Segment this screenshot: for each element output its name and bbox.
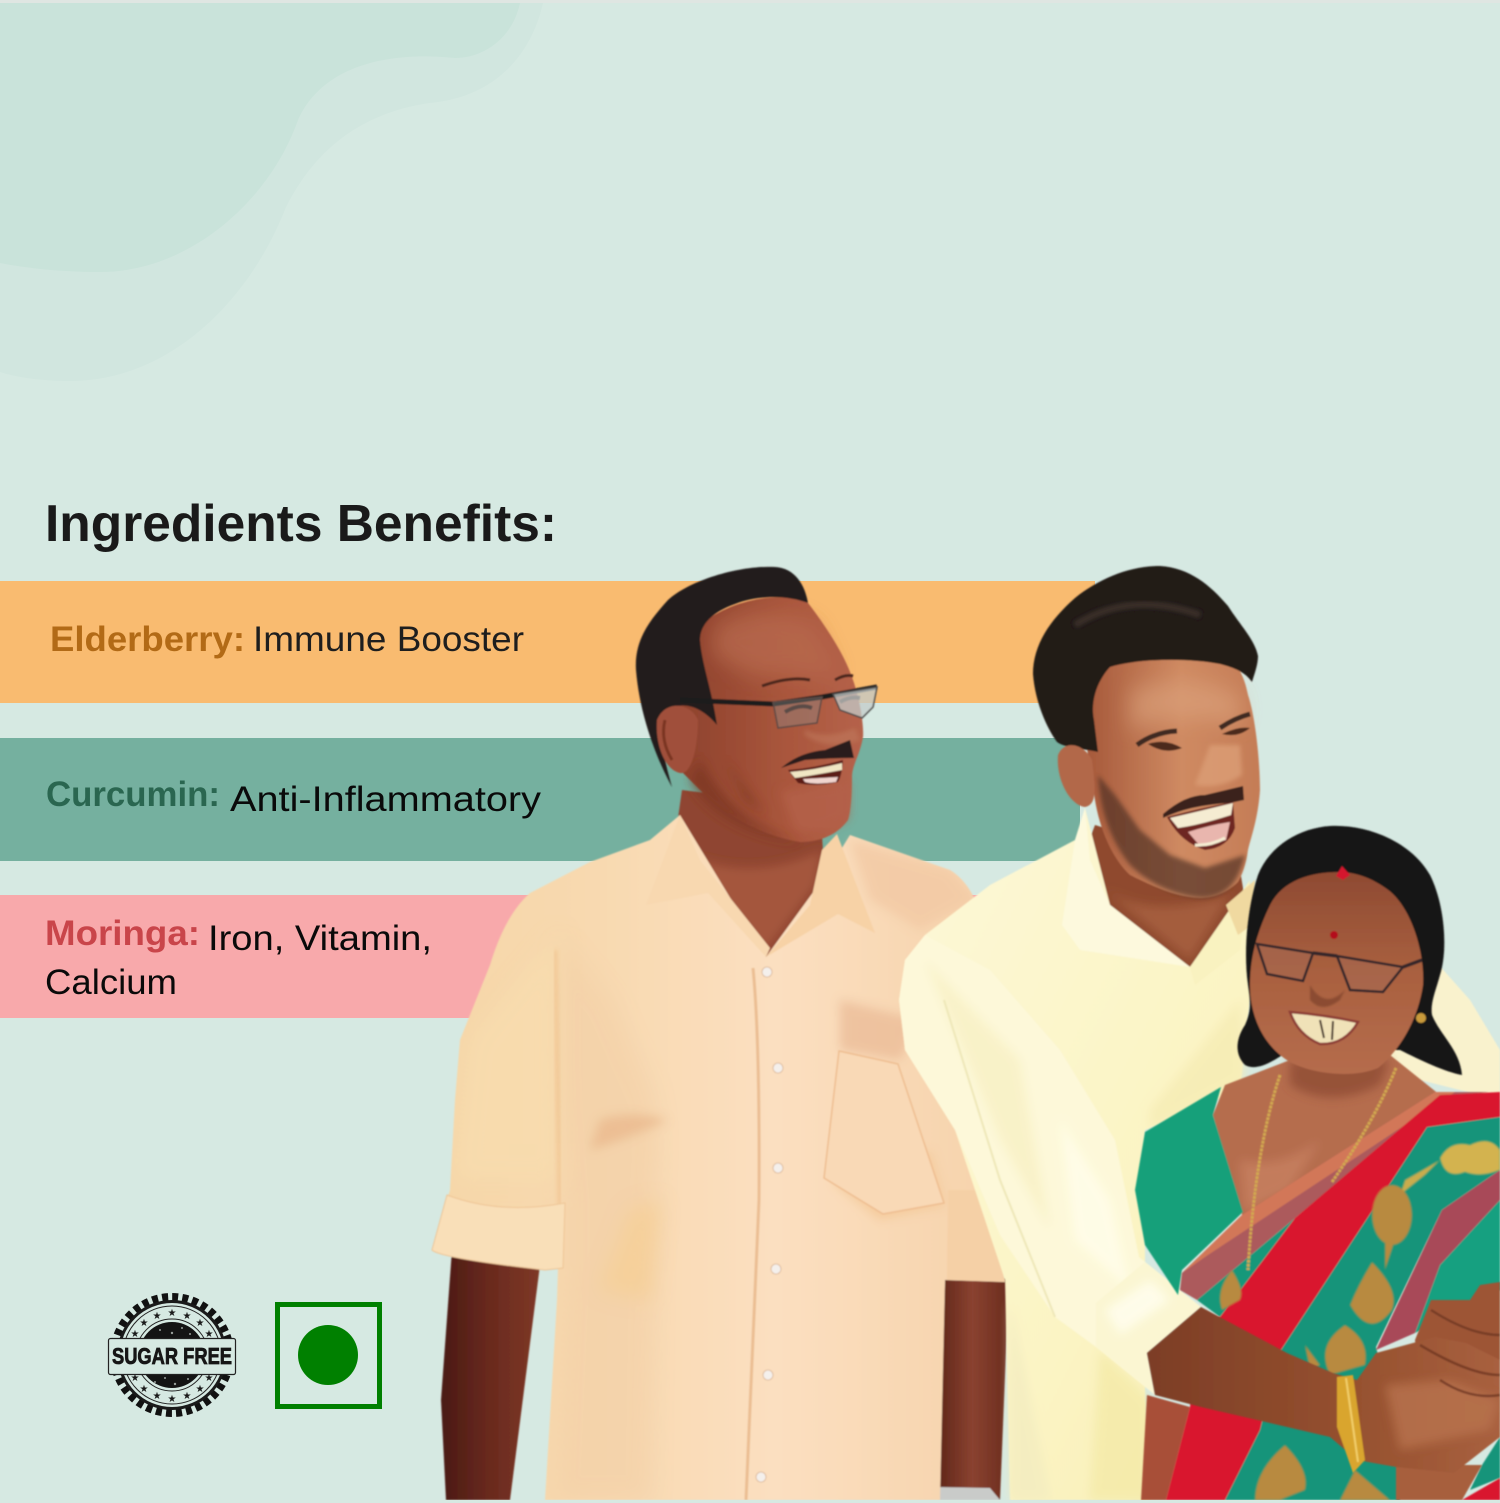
gold bracelet — [1337, 1375, 1365, 1473]
father face — [668, 597, 863, 842]
mother head — [1250, 866, 1426, 1074]
upper hand fingers — [1415, 1282, 1500, 1420]
son figure — [899, 566, 1500, 1500]
elderberry benefit: Immune Booster — [253, 620, 524, 659]
mother blouse — [1135, 1087, 1243, 1295]
mother necklace — [1248, 1068, 1396, 1270]
background wave shapes — [0, 3, 543, 381]
icon: sugar free badge: ★ — [140, 1384, 149, 1395]
father eyebrows — [762, 676, 853, 686]
son head — [1033, 566, 1260, 898]
mother nose — [1310, 985, 1345, 1007]
icon: sugar free badge: ★ — [140, 1318, 149, 1329]
mother bindi — [1330, 931, 1338, 939]
father mouth — [788, 760, 843, 785]
saree red band — [1166, 1092, 1500, 1500]
son beard — [1098, 775, 1245, 898]
pocket — [824, 1051, 944, 1214]
father shirt — [432, 815, 1005, 1500]
son sleeve — [899, 935, 1201, 1395]
icon: sugar free badge: ★ — [153, 1311, 162, 1322]
father moustache — [781, 740, 854, 768]
father left arm — [441, 1250, 540, 1500]
son neck — [1078, 825, 1245, 967]
panel: elderberry band — [0, 581, 1095, 703]
icon: sugar free badge: ★ — [153, 1391, 162, 1402]
son shirt — [899, 808, 1255, 1500]
icon: sugar free badge: ★ — [131, 1329, 140, 1340]
panel: curcumin band — [0, 738, 1080, 861]
father head — [636, 567, 877, 842]
mother face — [1250, 872, 1423, 1074]
son collar — [1062, 808, 1190, 967]
father hair — [636, 567, 808, 787]
hand finger lines — [1420, 1310, 1500, 1396]
hand highlight — [1385, 1380, 1500, 1450]
saree border stripe — [1180, 1092, 1489, 1300]
wrist watch — [936, 1487, 1000, 1500]
father glasses — [680, 687, 877, 728]
son shirt shading — [1150, 1000, 1245, 1130]
son forearm and hands — [1147, 1282, 1500, 1500]
moringa benefit line two: Calcium — [45, 963, 177, 1002]
shirt shading — [638, 1146, 639, 1156]
curcumin label: Curcumin: — [46, 775, 220, 814]
icon: sugar free badge: ★ — [205, 1329, 214, 1340]
panel: moringa band — [0, 895, 985, 1018]
son hair — [1033, 566, 1258, 752]
mother earring — [1416, 1013, 1426, 1023]
fabric below son's sleeve — [1141, 1395, 1190, 1500]
icon: vegetarian mark — [278, 1304, 380, 1406]
right sleeve cuff — [947, 1190, 1005, 1282]
mother figure — [1135, 826, 1500, 1500]
title: Ingredients Benefits: — [45, 495, 557, 553]
curcumin benefit: Anti-Inflammatory — [230, 780, 542, 819]
son moustache — [1163, 786, 1244, 818]
red saree lower corner — [1462, 1478, 1500, 1500]
father neck — [672, 790, 825, 958]
saree green fold — [1197, 1218, 1295, 1317]
moringa benefit line one: Iron, Vitamin, — [208, 919, 432, 958]
father collar right — [766, 834, 875, 957]
mother smile — [1290, 1012, 1358, 1044]
saree gold motifs — [1220, 1141, 1500, 1500]
moringa label: Moringa: — [45, 914, 200, 953]
son eyebrows — [1137, 714, 1250, 745]
son eyes — [1148, 728, 1250, 751]
saree right green panel — [1415, 1200, 1500, 1333]
icon: sugar free badge: ★ — [205, 1373, 214, 1384]
icon: sugar free badge: ★ — [168, 1308, 177, 1319]
icon: sugar free badge: ★ — [183, 1391, 192, 1402]
left sleeve cuff — [432, 1195, 565, 1270]
father ear — [657, 706, 698, 773]
icon: sugar free badge: ★ — [183, 1311, 192, 1322]
mother chest — [1213, 1055, 1440, 1218]
bottom edge strip — [0, 1500, 1500, 1503]
son nose — [1195, 745, 1242, 786]
green saree lower corner — [1470, 1437, 1500, 1490]
father collar left — [646, 815, 770, 957]
shirt buttons — [756, 967, 783, 1482]
mother glasses — [1257, 944, 1422, 992]
icon: sugar free badge: SUGAR FREE — [112, 1343, 232, 1369]
icon: sugar free badge: ★ — [131, 1373, 140, 1384]
son shoulder behind mother — [1380, 955, 1500, 1100]
icon: sugar free badge: ★ — [168, 1394, 177, 1405]
saree green pallu — [1225, 1117, 1500, 1500]
mother back hair — [1238, 826, 1462, 1075]
top edge strip — [0, 0, 1500, 3]
son cuff — [1096, 1262, 1201, 1395]
mother forehead sindoor — [1336, 866, 1350, 880]
son forearm — [1147, 1307, 1500, 1473]
icon: sugar free badge: ★ — [196, 1318, 205, 1329]
icon: sugar free badge: ★ — [196, 1384, 205, 1395]
icon: sugar free badge — [108, 1297, 236, 1413]
father right arm — [936, 1278, 1009, 1500]
son face — [1085, 648, 1260, 898]
placket — [746, 968, 759, 1500]
elderberry label: Elderberry: — [50, 620, 245, 659]
son mouth — [1167, 802, 1235, 850]
father figure — [432, 567, 1009, 1500]
son ear — [1058, 745, 1095, 807]
father nose — [805, 728, 860, 745]
father eyes — [785, 698, 860, 712]
mother arm under hand — [1396, 1465, 1482, 1500]
saree mauve stripe — [1376, 1170, 1500, 1350]
